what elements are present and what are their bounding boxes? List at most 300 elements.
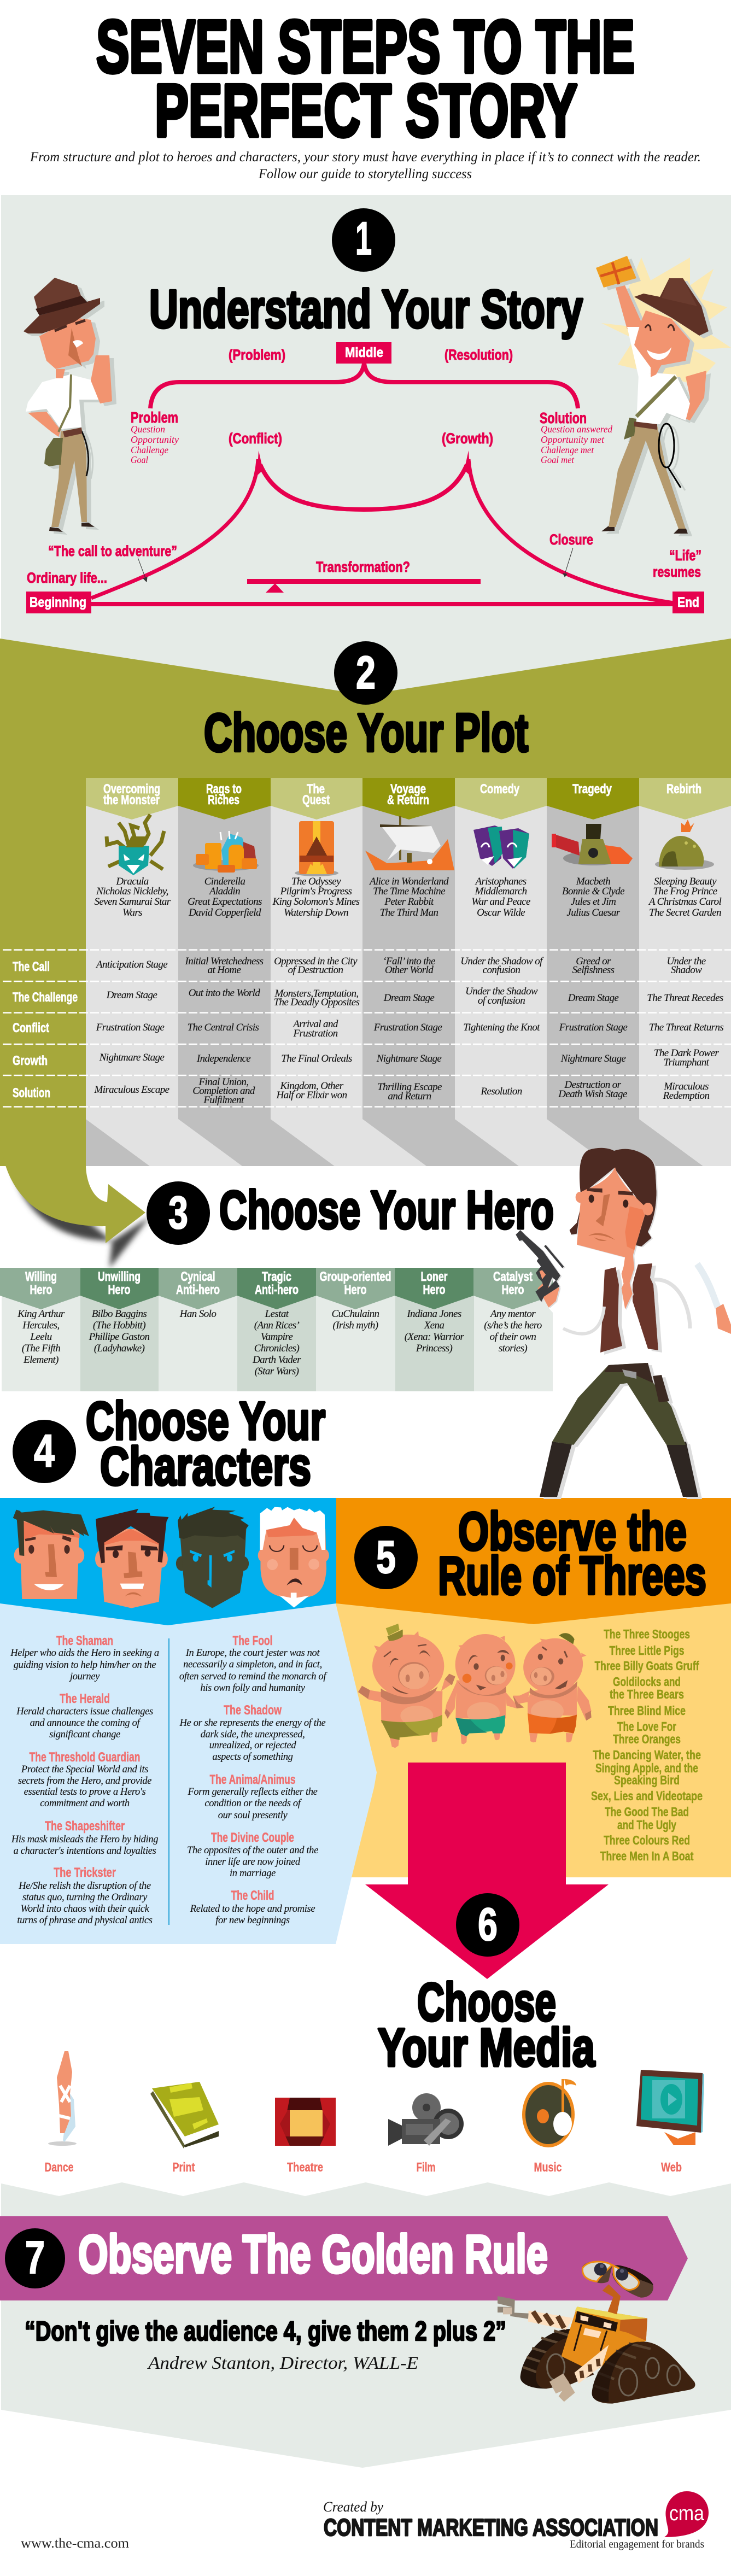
character descriptions: left column: The Shapeshifter [45, 1819, 125, 1834]
table cells: The Threat Returns [649, 1022, 723, 1033]
table cells: Greed or [576, 956, 611, 967]
icon: poison and dagger [552, 824, 633, 865]
hero examples: (Xena: Warrior [405, 1331, 464, 1343]
table cells: Kingdom, Other [279, 1080, 344, 1092]
step 2 number [334, 641, 397, 705]
example lists: Julius Caesar [566, 907, 621, 918]
hero headers: Hero [344, 1283, 366, 1297]
heading: observe the rule of threes [438, 1501, 706, 1606]
icon: frog prince [655, 819, 714, 870]
character descriptions: left column: essential tests to prove a Hero's [24, 1787, 146, 1798]
character descriptions: right column: for new beginnings [215, 1915, 290, 1926]
media labels: Music [534, 2160, 562, 2174]
heading: understand your story: Understand Your Story [149, 279, 583, 339]
table cells: Out into the World [189, 987, 260, 999]
list: rule of threes examples: Goldilocks and [613, 1675, 681, 1689]
panel: rule of threes yellow [336, 1585, 731, 1877]
hero headers: Willing [25, 1269, 57, 1284]
balance: transformation: Transformation? [316, 559, 410, 575]
panel: orange header [336, 1498, 731, 1624]
table cells: and Return [388, 1091, 431, 1102]
table cells: of confusion [478, 995, 525, 1006]
arc labels [27, 347, 701, 586]
step 7 number: 7 [25, 2232, 45, 2283]
arc labels: “Life” [669, 547, 701, 564]
hero examples: (The Hobbitt) [93, 1320, 145, 1331]
table cells: Redemption [663, 1090, 709, 1102]
heading: choose your media: Choose [417, 1972, 556, 2032]
column headers: the Monster [103, 793, 160, 807]
column headers: Comedy [480, 782, 519, 797]
box: beginning [26, 592, 91, 613]
ribbon: golden rule [0, 2216, 688, 2300]
character descriptions: right column: inner life are now joined [205, 1857, 301, 1867]
table cells: The Final Ordeals [281, 1053, 352, 1064]
table cells: The Deadly Opposites [274, 997, 360, 1008]
hero headers: Hero [108, 1283, 130, 1297]
character descriptions: right column: condition or the needs of [204, 1798, 302, 1809]
table cells: The Central Crisis [188, 1022, 259, 1033]
panel: step 1 background [1, 195, 731, 715]
hero examples: Leelu [30, 1331, 52, 1343]
list: rule of threes examples: The Three Stooges [604, 1627, 690, 1641]
column headers: The [307, 782, 325, 797]
example lists [94, 876, 721, 918]
example lists: Bonnie & Clyde [562, 886, 624, 897]
character descriptions: right column: our soul presently [218, 1810, 288, 1821]
hero examples: Bilbo Baggins [92, 1308, 147, 1320]
face: old mentor [258, 1507, 329, 1608]
list: rule of threes examples: Three Billy Goats Gruff [595, 1659, 699, 1673]
arrow shadow [11, 1159, 150, 1268]
character descriptions: right column: often served to remind the monarch of [179, 1671, 328, 1682]
box: middle [336, 342, 391, 364]
face: herald [95, 1509, 168, 1608]
example lists: Wars [122, 907, 142, 918]
column headers [86, 778, 731, 819]
arrow to step 3 [0, 1115, 145, 1243]
hero examples: Hercules, [22, 1320, 60, 1331]
hero examples: (Ladyhawke) [94, 1343, 145, 1354]
hero examples: of their own [490, 1331, 536, 1343]
box: end: End [677, 595, 699, 610]
table cells: Initial Wretchedness [185, 956, 264, 967]
hero headers: Unwilling [98, 1269, 141, 1284]
table cells: Under the Shadow of [460, 956, 544, 967]
logo: cma: cma [669, 2502, 705, 2525]
hero examples: (Star Wars) [255, 1366, 299, 1377]
heading: observe the golden rule: Observe The Golden Rule [78, 2224, 548, 2284]
step 5 number [354, 1526, 418, 1589]
hero headers: Loner [421, 1269, 447, 1284]
row labels: Conflict [13, 1021, 49, 1035]
character descriptions: left column [10, 1634, 159, 1926]
example lists: The Odyssey [291, 876, 341, 887]
illustration: three pigs [358, 1624, 592, 1748]
footer: credit: Created by [323, 2499, 383, 2515]
example lists: A Christmas Carol [648, 896, 721, 908]
table cells: Resolution [480, 1086, 522, 1097]
icon: ship [365, 816, 454, 870]
character descriptions: right column: in marriage [230, 1868, 276, 1879]
intro text [30, 150, 701, 182]
table cells: Dream Stage [568, 992, 618, 1004]
arc labels: Closure [549, 531, 593, 548]
row labels: Solution [13, 1086, 50, 1100]
example lists: War and Peace [471, 896, 530, 908]
character descriptions: left column: a character's intentions and loyalties [14, 1846, 156, 1857]
hero headers: Cynical [180, 1269, 215, 1284]
hero examples: Phillipe Gaston [89, 1331, 149, 1343]
character descriptions: left column: guiding vision to help him/her on the [14, 1660, 156, 1671]
arc labels: Question answered [541, 424, 613, 435]
table cells: Frustration Stage [96, 1022, 164, 1033]
hero head [570, 1148, 657, 1309]
intro text: Follow our guide to storytelling success [258, 167, 472, 182]
example lists: Nicholas Nickleby, [96, 886, 168, 897]
example lists: Great Expectations [188, 896, 262, 908]
pig 3 [513, 1631, 592, 1742]
example lists: Jules et Jim [571, 896, 616, 908]
step 2 number: 2 [356, 647, 376, 698]
column headers: Rebirth [666, 782, 701, 797]
column headers: Voyage [390, 782, 426, 797]
table cells [93, 956, 723, 1106]
example lists: Middlemarch [474, 886, 527, 897]
box: beginning: Beginning [30, 595, 86, 610]
illustration: hero in step 3 [516, 1148, 731, 1497]
arc labels: Challenge met [541, 444, 594, 455]
arc labels: Ordinary life... [27, 570, 107, 586]
table cells: at Home [208, 964, 241, 976]
media icon: music [524, 2079, 576, 2146]
divider [168, 1638, 169, 1925]
list: rule of threes examples: Three Oranges [613, 1732, 681, 1746]
media icon: theatre [275, 2098, 336, 2146]
table cells: The Threat Recedes [647, 992, 723, 1004]
table cells: Independence [196, 1053, 250, 1064]
heading: choose your characters: Choose Your [86, 1391, 325, 1451]
character descriptions: left column: Herald characters issue challenges [16, 1706, 153, 1717]
pig 2 [445, 1634, 524, 1744]
table cells: Death Wish Stage [558, 1088, 627, 1100]
character descriptions: right column: The opposites of the outer and the [187, 1845, 318, 1856]
example lists: Dracula [115, 876, 149, 887]
column headers: Rags to [206, 782, 242, 797]
media icon: dance [48, 2051, 77, 2146]
arc labels: Problem [131, 409, 178, 426]
list: rule of threes examples: Singing Apple, and the [595, 1761, 698, 1775]
footer: website: www.the-cma.com [21, 2536, 130, 2551]
character descriptions: right column: necessarily a simpleton, and in fact, [183, 1659, 322, 1670]
table cells: Under the Shadow [465, 986, 538, 997]
hero headers: Anti-hero [176, 1283, 220, 1297]
illustration: thinking explorer [24, 278, 112, 532]
table cells: Miraculous [663, 1081, 709, 1092]
table cells: Miraculous Escape [93, 1084, 169, 1096]
icon: masks [473, 826, 529, 869]
column headers: & Return [387, 793, 429, 807]
arc labels: (Growth) [442, 430, 493, 447]
step 4 number: 4 [34, 1425, 55, 1477]
column headers: Tragedy [572, 782, 612, 797]
example lists: Sleeping Beauty [654, 876, 717, 887]
character descriptions: right column: The Fool [233, 1634, 272, 1648]
arc labels: Opportunity met [541, 434, 605, 445]
character descriptions: left column: and announce the coming of [30, 1718, 141, 1729]
list: rule of threes examples: and The Ugly [617, 1818, 676, 1832]
media labels: Theatre [287, 2160, 323, 2174]
table cells: Nightmare Stage [376, 1053, 441, 1064]
hero headers [25, 1269, 533, 1297]
panel: characters light blue [0, 1498, 377, 1944]
heading: choose your media: Your Media [378, 2017, 595, 2077]
hero headers: Catalyst [493, 1269, 533, 1284]
arrow to step 6 [365, 1763, 609, 1979]
panel: step 2 background [0, 639, 731, 1166]
column headers: Riches [208, 793, 239, 807]
example lists: Oscar Wilde [477, 907, 525, 918]
panel: characters blue header [0, 1498, 336, 1625]
heading: choose your characters: Characters [100, 1436, 311, 1496]
list: rule of threes examples: Three Men In A Boat [600, 1849, 694, 1863]
hero examples: Element) [23, 1354, 59, 1366]
example lists: King Solomon's Mines [272, 896, 360, 908]
arc labels: resumes [653, 564, 701, 580]
example lists: The Frog Prince [653, 886, 717, 897]
media labels [45, 2160, 682, 2174]
attribution: Andrew Stanton, Director, WALL-E [147, 2353, 418, 2373]
box: middle: Middle [345, 345, 383, 360]
list: rule of threes examples: Three Blind Mice [608, 1703, 686, 1718]
hero headers: Hero [423, 1283, 445, 1297]
example lists: Cinderella [204, 876, 245, 887]
hero headers: Hero [30, 1283, 52, 1297]
hero examples: Indiana Jones [406, 1308, 461, 1320]
table cells: ‘Fall’ into the [383, 956, 435, 967]
icon: riches [193, 831, 259, 873]
table cells: Half or Elixir won [276, 1090, 347, 1101]
table cells: Dream Stage [106, 990, 157, 1001]
hero examples: (The Fifth [22, 1343, 60, 1354]
example lists: The Time Machine [373, 886, 445, 897]
hero headers: Group-oriented [319, 1269, 391, 1284]
hero examples: Han Solo [179, 1308, 216, 1320]
character descriptions: right column: dark side, the unexpressed, [201, 1729, 305, 1740]
face: shaman [13, 1510, 89, 1599]
panel: step 7 background [1, 2182, 731, 2468]
hero examples: Any mentor [489, 1308, 536, 1320]
arc labels: Challenge [131, 444, 168, 455]
arc labels: Goal met [541, 454, 575, 465]
arc labels: Solution [540, 409, 587, 426]
row labels: The Call [13, 959, 50, 974]
logo: cma [664, 2491, 709, 2537]
hero examples: (s/he’s the hero [484, 1320, 542, 1331]
column headers: Overcoming [103, 782, 160, 797]
media labels: Web [661, 2160, 682, 2174]
hero headers: Tragic [262, 1269, 291, 1284]
face: shadow [176, 1507, 249, 1608]
icon: totem [295, 821, 338, 876]
character descriptions: left column: status quo, turning the Ordinary [22, 1892, 148, 1903]
row labels [13, 959, 78, 1100]
step 5 number: 5 [376, 1531, 396, 1583]
table cells: of Destruction [288, 964, 343, 976]
character descriptions: left column: His mask misleads the Hero by hiding [11, 1834, 158, 1845]
table cells: Frustration [293, 1028, 338, 1039]
table: hero types [0, 1268, 553, 1391]
list: rule of threes examples: Sex, Lies and Videotape [591, 1789, 703, 1803]
media labels: Print [173, 2160, 195, 2174]
icon: blaster [516, 1230, 563, 1308]
column headers: Quest [302, 793, 330, 807]
media icon: film camera [388, 2093, 464, 2146]
hero examples [17, 1308, 542, 1377]
media labels: Dance [45, 2160, 73, 2174]
hero shirt [548, 1257, 717, 1364]
table cells: Shadow [671, 964, 702, 976]
example lists: Watership Down [284, 907, 348, 918]
character descriptions: left column: significant change [49, 1729, 120, 1740]
table cells: confusion [483, 964, 520, 976]
hero examples: Lestat [265, 1308, 289, 1320]
illustration: triumphant explorer [596, 256, 731, 534]
character descriptions: right column: The Anima/Animus [210, 1772, 295, 1787]
hero headers: Anti-hero [255, 1283, 299, 1297]
example lists: The Secret Garden [649, 907, 721, 918]
table cells: Frustration Stage [559, 1022, 627, 1033]
example lists: Aristophanes [474, 876, 527, 887]
quote: “Don't give the audience 4, give them 2 plus 2” [25, 2316, 506, 2346]
title [96, 5, 635, 152]
list: rule of threes examples: The Dancing Water, the [593, 1748, 701, 1762]
row labels: Growth [13, 1053, 48, 1068]
example lists: Seven Samurai Star [94, 896, 171, 908]
table cells: Completion and [192, 1085, 255, 1097]
list: rule of threes examples: The Good The Bad [605, 1805, 689, 1819]
character descriptions: right column: The Child [231, 1888, 274, 1903]
character descriptions: right column: The Shadow [224, 1703, 282, 1718]
balance: transformation [247, 559, 481, 593]
footer: credit [323, 2499, 704, 2550]
row labels: The Challenge [13, 990, 78, 1005]
list: rule of threes examples [591, 1627, 703, 1863]
list: rule of threes examples: Three Little Pigs [609, 1643, 685, 1658]
example lists: David Copperfield [188, 907, 261, 918]
box: end [672, 592, 704, 613]
media icon: web [636, 2070, 704, 2145]
step 3 number: 3 [168, 1187, 188, 1238]
example lists: The Third Man [380, 907, 438, 918]
example lists: Peter Rabbit [384, 896, 434, 908]
table cells: Oppressed in the City [274, 956, 358, 967]
character descriptions: left column: The Trickster [54, 1865, 116, 1880]
hero examples: Chronicles) [254, 1343, 299, 1354]
character descriptions: right column: aspects of something [212, 1752, 293, 1763]
character descriptions: right column: In Europe, the court jester was not [185, 1648, 320, 1659]
pig 1 [358, 1624, 455, 1748]
table cells: Tightening the Knot [463, 1022, 540, 1033]
footer: credit: Editorial engagement for brands [570, 2538, 704, 2550]
hero examples: Vampire [261, 1331, 293, 1343]
hero examples: CuChulainn [332, 1308, 379, 1320]
list: rule of threes examples: The Love For [617, 1719, 676, 1734]
diagram: story arc [26, 342, 704, 613]
arc labels: (Resolution) [445, 347, 513, 363]
arc labels: Opportunity [131, 434, 179, 445]
heading: choose your hero: Choose Your Hero [219, 1180, 554, 1240]
step 1 number: 1 [355, 213, 372, 264]
example lists: Aladdin [208, 886, 240, 897]
character descriptions: left column: journey [69, 1671, 100, 1682]
table cells: Triumphant [664, 1057, 710, 1068]
hero headers: Hero [502, 1283, 524, 1297]
character descriptions: left column: The Threshold Guardian [30, 1750, 140, 1765]
hero examples: (Irish myth) [332, 1320, 378, 1331]
table cells: Other World [385, 964, 434, 976]
arc labels: “The call to adventure” [48, 543, 177, 559]
heading: choose your plot: Choose Your Plot [204, 702, 528, 763]
character descriptions: right column: The Divine Couple [211, 1830, 294, 1845]
table: plots [3, 778, 731, 1166]
hero examples: stories) [499, 1343, 527, 1354]
arc labels: (Problem) [229, 347, 285, 363]
table cells: Selfishness [572, 964, 615, 976]
table cells: Anticipation Stage [95, 959, 167, 970]
hero examples: Darth Vader [252, 1354, 301, 1366]
table cells: Under the [666, 956, 706, 967]
table cells: Nightmare Stage [99, 1052, 164, 1063]
table cells: Final Union, [198, 1076, 248, 1088]
heading: choose your characters [86, 1391, 325, 1496]
example lists: Pilgrim's Progress [280, 886, 352, 897]
media labels: Film [417, 2160, 435, 2174]
step 4 number [13, 1420, 76, 1483]
step 3 number [147, 1181, 210, 1245]
character descriptions: left column: commitment and worth [40, 1798, 130, 1809]
table cells: The Dark Power [654, 1047, 719, 1059]
arc labels: (Conflict) [229, 430, 282, 447]
character descriptions: left column: The Shaman [56, 1634, 113, 1648]
media icon: print [150, 2082, 219, 2148]
table cells: Arrival and [292, 1018, 338, 1030]
example lists: Macbeth [576, 876, 610, 887]
character descriptions: left column: He/She relish the disruption of the [18, 1881, 151, 1892]
example lists: Alice in Wonderland [369, 876, 449, 887]
icon: monster mask [107, 815, 164, 875]
character descriptions: right column: Form generally reflects either the [187, 1787, 318, 1798]
illustration: robot [498, 2261, 695, 2404]
arc labels: Question [131, 424, 165, 435]
character descriptions: right column: He or she represents the energy of the [179, 1718, 325, 1729]
hero examples: (Ann Rices’ [254, 1320, 300, 1331]
character descriptions: left column: turns of phrase and physical antics [17, 1915, 153, 1926]
table cells: Destruction or [564, 1079, 622, 1091]
character descriptions: left column: Protect the Special World and its [21, 1764, 148, 1775]
table cells: Nightmare Stage [560, 1053, 625, 1064]
character descriptions: right column: Related to the hope and promise [190, 1904, 315, 1915]
character descriptions: right column [179, 1634, 328, 1926]
character descriptions: right column: unrealized, or rejected [209, 1740, 296, 1751]
table cells: Dream Stage [383, 992, 434, 1004]
step 6 number: 6 [478, 1899, 498, 1950]
list: rule of threes examples: Speaking Bird [614, 1773, 680, 1787]
intro text: From structure and plot to heroes and characters, your story must have everything in place if it’s to connect with the reader. [30, 150, 701, 165]
table cells: Fulfilment [203, 1094, 244, 1106]
list: rule of threes examples: the Three Bears [610, 1687, 684, 1701]
heading: choose your media [378, 1972, 595, 2077]
